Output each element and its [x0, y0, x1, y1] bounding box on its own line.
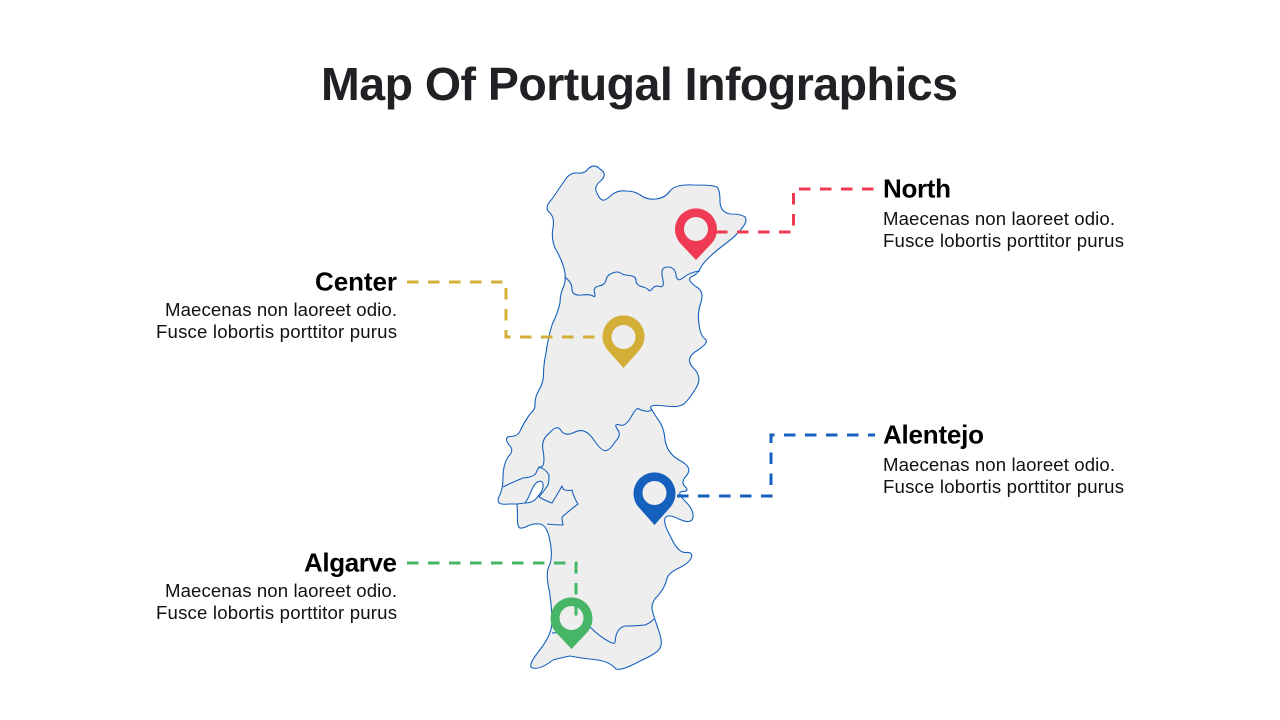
label: center [156, 266, 397, 342]
pin: center [602, 315, 644, 368]
north-center border [564, 267, 700, 297]
connector: north [716, 189, 875, 232]
label: north: North [883, 174, 951, 204]
connector: alentejo [677, 435, 875, 496]
pin: north [675, 208, 717, 260]
estuary [517, 481, 543, 504]
label: alentejo: Alentejo [883, 420, 984, 450]
map of Portugal [498, 166, 746, 669]
label: north: Fusce lobortis porttitor purus [883, 230, 1124, 251]
algarve border [552, 619, 654, 643]
label: algarve: Fusce lobortis porttitor purus [156, 602, 397, 623]
label: alentejo: Fusce lobortis porttitor purus [883, 476, 1124, 497]
label: algarve [156, 548, 397, 623]
connector: center [407, 282, 600, 337]
label: north [883, 174, 1124, 251]
label: north: Maecenas non laoreet odio. [883, 208, 1115, 229]
label: algarve: Algarve [304, 548, 397, 578]
label: center: Maecenas non laoreet odio. [165, 299, 397, 320]
lisbon peninsula border [538, 467, 578, 525]
label: alentejo [883, 420, 1124, 497]
connector: algarve [407, 563, 576, 616]
label: center: Fusce lobortis porttitor purus [156, 321, 397, 342]
center-alentejo border [503, 408, 652, 487]
pin: algarve [550, 597, 592, 649]
title: Map Of Portugal Infographics [321, 58, 958, 110]
label: algarve: Maecenas non laoreet odio. [165, 580, 397, 601]
label: center: Center [315, 266, 397, 296]
map outline [498, 166, 746, 669]
pin: alentejo [634, 472, 676, 525]
label: alentejo: Maecenas non laoreet odio. [883, 454, 1115, 475]
